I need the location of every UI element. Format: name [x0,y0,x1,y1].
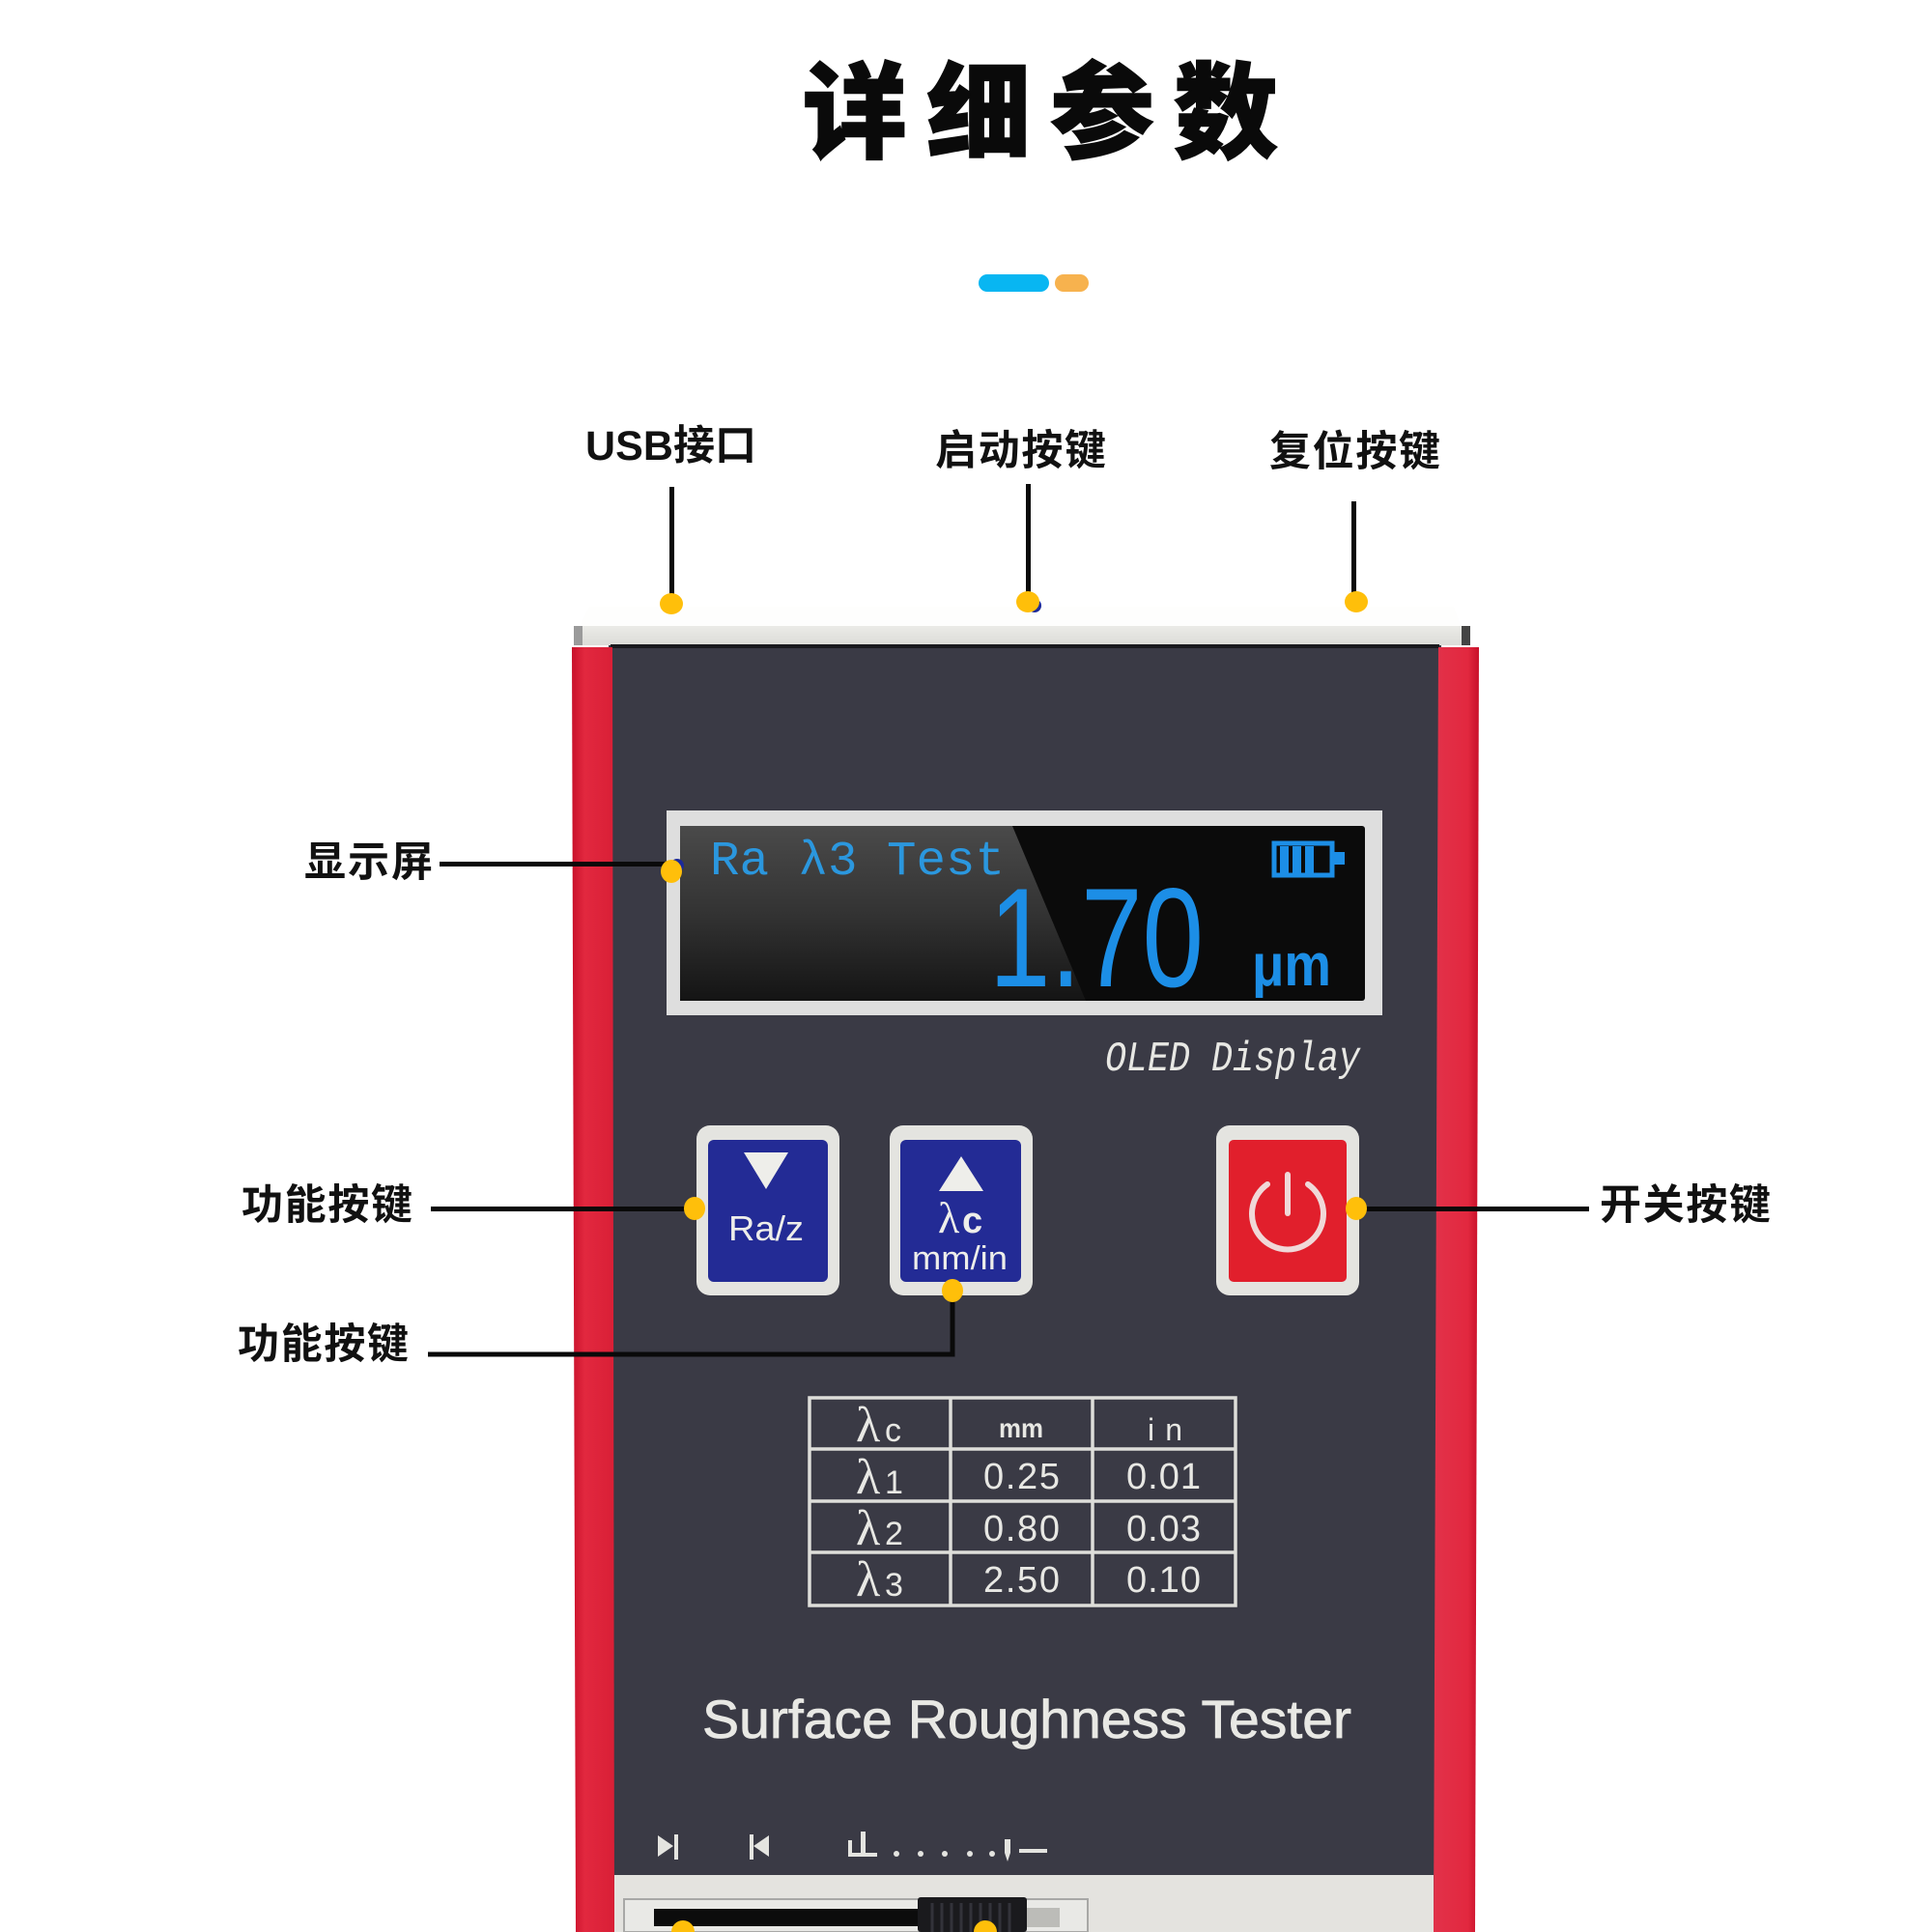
screen text: mode: Ra λ3 Test [710,835,1005,890]
right red rail [1434,647,1479,1932]
cutoff table [810,1398,1236,1607]
table row 2: 0.80 [983,1509,1060,1549]
icon: battery [1274,843,1345,875]
table row 2: 2 [885,1516,903,1552]
button: lambda c and mm/in: λ [938,1193,960,1242]
sensor connector [918,1897,1027,1932]
table header row [856,1398,1182,1453]
table header row: λ [856,1398,880,1453]
stroke icons row [658,1832,1047,1861]
table row 3: 3 [885,1567,903,1604]
callout: function key 2 [238,1279,963,1368]
button: Ra/z: Ra/z [728,1208,804,1248]
table row 2 [856,1501,1201,1556]
table row 2: λ [856,1501,880,1556]
title: 详细参数 [803,55,1278,172]
callout: display [304,839,684,886]
callout: power key: 开关按键 [1600,1182,1771,1229]
sensor rod [654,1909,919,1926]
button: lambda c and mm/in: c [962,1201,982,1241]
callout: power key [1346,1182,1771,1229]
callout: reset key [1269,429,1440,612]
table header row: c [885,1412,901,1449]
table grid [810,1398,1236,1605]
table row 3 [856,1552,1201,1607]
callout: function key 2: 功能按键 [238,1321,409,1368]
table row 1: 1 [885,1464,903,1501]
table row 3: 2.50 [983,1560,1060,1601]
button: lambda c and mm/in [890,1125,1033,1295]
sensor tip [1027,1908,1060,1927]
device top silver edge [574,607,1470,645]
display [667,810,1382,1016]
callout: start key: 启动按键 [935,428,1106,474]
table header row: mm [999,1413,1043,1443]
table row 2: 0.03 [1126,1509,1201,1549]
display screen [680,826,1365,1001]
callout dots at bottom [671,1920,997,1932]
screen text: reading: 1.70 [989,859,1204,1016]
button: lambda c and mm/in: mm/in [912,1240,1008,1277]
screen text: unit: μm [1252,932,1331,999]
left red rail [572,647,614,1932]
title accent pills [979,274,1089,292]
button: power [1216,1125,1359,1295]
display frame [667,810,1382,1015]
table row 1: λ [856,1450,880,1505]
device: surface roughness tester [572,607,1479,1932]
device panel [609,645,1441,1932]
screen sheen [680,826,1086,1001]
table row 1: 0.25 [983,1457,1060,1497]
table row 3: 0.10 [1126,1560,1201,1601]
callout: USB: USB接口 [585,423,756,469]
callout: function key 1 [242,1182,705,1229]
button: Ra/z [696,1125,839,1295]
callout: start key [935,428,1106,612]
product name: Surface Roughness Tester [702,1689,1351,1749]
table row 1: 0.01 [1126,1457,1201,1497]
table header row: in [1148,1412,1182,1447]
sensor slot [624,1899,1088,1932]
table row 1 [856,1450,1201,1505]
callout: display: 显示屏 [304,839,433,886]
callout: reset key: 复位按键 [1269,429,1440,475]
lower silver body [614,1875,1434,1932]
callout: USB [585,423,756,614]
OLED Display caption: OLED Display [1105,1036,1361,1084]
table row 3: λ [856,1552,880,1607]
panel top shadow [611,644,1439,648]
icon: power symbol [1252,1175,1323,1249]
callout: function key 1: 功能按键 [242,1182,412,1229]
